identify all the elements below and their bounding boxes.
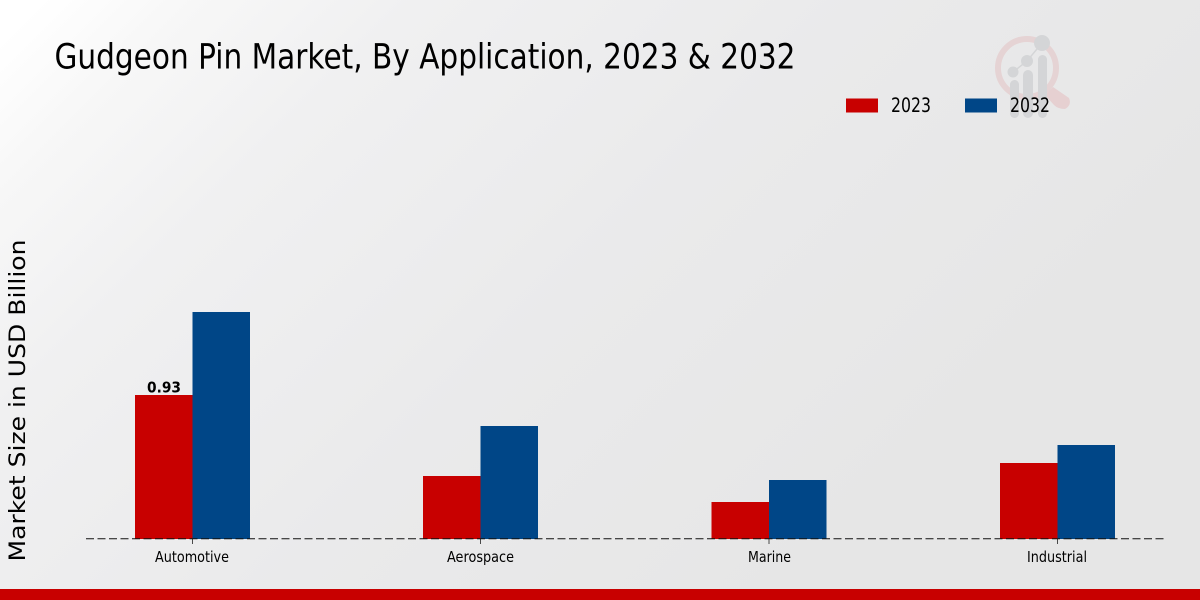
bars: Aerospace: [423, 426, 538, 539]
x axis baseline: [86, 538, 1164, 540]
bars: Industrial: [1000, 445, 1115, 539]
icon: watermark logo: [998, 35, 1070, 118]
x-axis labels: Industrial: [1027, 548, 1087, 566]
footer bar: [0, 589, 1200, 600]
legend: [846, 94, 1050, 117]
legend item: 2032: 2032: [1010, 94, 1050, 117]
legend item: 2032: [965, 94, 1050, 117]
bars: Automotive: [135, 312, 250, 539]
x-axis labels: Marine: [748, 548, 791, 566]
data label: 0.93: 0.93: [147, 378, 181, 396]
y-axis title: Market Size in USD Billion: [5, 240, 31, 562]
title: Gudgeon Pin Market, By Application, 2023 & 2032: [54, 38, 796, 78]
x-axis labels: Aerospace: [447, 548, 514, 566]
bars: Marine: [712, 480, 826, 539]
x-axis labels: [155, 548, 1087, 566]
bar chart: [86, 312, 1164, 566]
legend item: 2023: 2023: [891, 94, 931, 117]
legend item: 2023: [846, 94, 931, 117]
x-axis labels: Automotive: [155, 548, 229, 566]
